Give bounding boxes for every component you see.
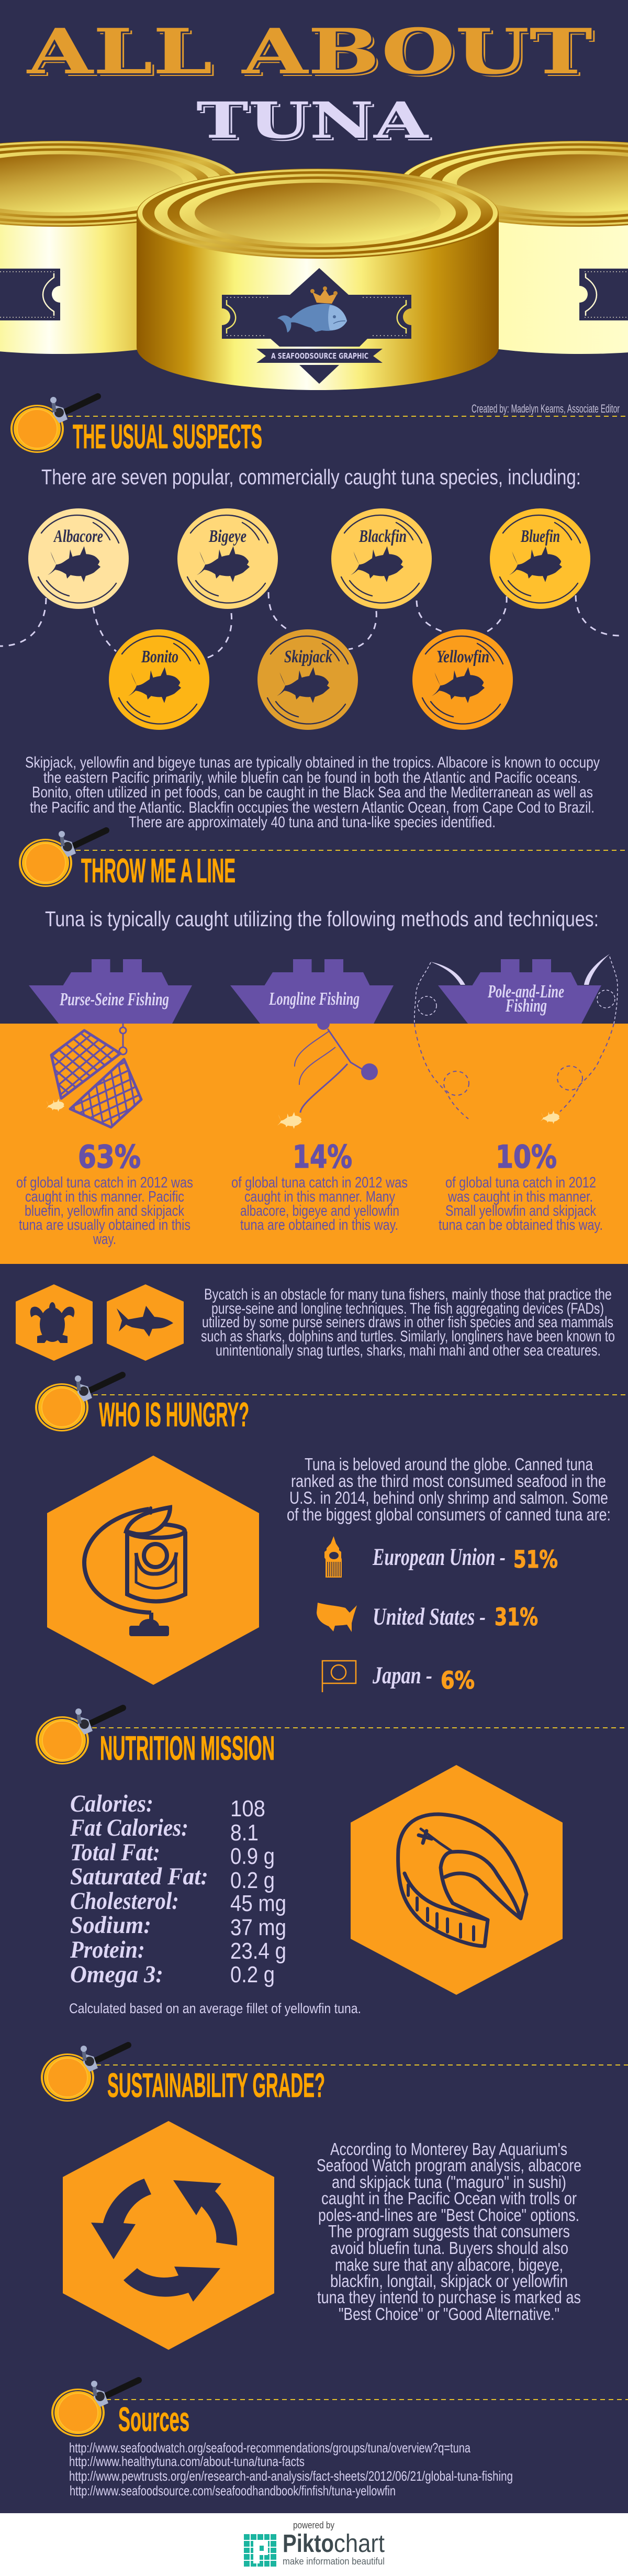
- section heading with can icon: WHO IS HUNGRY?: [99, 1395, 249, 1434]
- icon: fish steak hexagon: [351, 1765, 563, 1995]
- method: purse-seine fishing: Purse-Seine Fishing: [59, 989, 169, 1009]
- nutrition table: 23.4 g: [230, 1938, 286, 1964]
- method: pole-and-line fishing: Small yellowfin and skipjack: [445, 1203, 596, 1219]
- section: throw me a line: [0, 830, 628, 1264]
- method: pole-and-line fishing: Pole-and-Line: [487, 981, 564, 1002]
- right can: [399, 141, 628, 354]
- nutrition table: [70, 1790, 286, 1988]
- method: longline fishing: tuna are obtained in this way.: [240, 1217, 398, 1234]
- can label badge: [222, 268, 411, 384]
- ship: [230, 959, 394, 1024]
- bycatch paragraph: [201, 1286, 615, 1359]
- method: pole-and-line fishing: of global tuna catch in 2012: [445, 1174, 596, 1191]
- method: purse-seine fishing: [16, 959, 193, 1248]
- method: purse-seine fishing: tuna are usually obtained in this: [19, 1217, 190, 1234]
- nutrition table: 0.9 g: [230, 1844, 275, 1869]
- method: purse-seine fishing: caught in this manner. Pacific: [25, 1189, 184, 1205]
- icon: can on globe hexagon: [47, 1456, 259, 1685]
- method: longline fishing: 14%: [293, 1139, 352, 1175]
- ribbon text: A SEAFOODSOURCE GRAPHIC: [271, 351, 368, 361]
- nutrition table: 45 mg: [230, 1891, 286, 1916]
- species: bonito: [109, 629, 209, 730]
- consumer: european union: European Union -: [372, 1544, 506, 1571]
- footer: piktochart: [0, 2513, 628, 2576]
- section heading with can icon: [41, 2045, 628, 2104]
- consumer: united states: [317, 1603, 538, 1632]
- section: sustainability grade: [41, 2045, 628, 2350]
- section heading with can icon: NUTRITION MISSION: [100, 1729, 275, 1767]
- method: purse-seine fishing: way.: [93, 1231, 116, 1248]
- nutrition table: Omega 3:: [70, 1961, 163, 1988]
- dashed connectors: [0, 592, 623, 658]
- nutrition table: Calories:: [70, 1790, 153, 1817]
- consumer: european union: 51%: [513, 1546, 558, 1573]
- consumer: japan: Japan -: [372, 1662, 432, 1689]
- source links: http://www.pewtrusts.org/en/research-and-analysis/fact-sheets/2012/06/21/global-tuna-fishing: [69, 2468, 513, 2484]
- species: albacore: Albacore: [53, 527, 103, 546]
- footer: piktochart: make information beautiful: [283, 2556, 385, 2567]
- footer: piktochart: chart: [334, 2530, 385, 2558]
- nutrition table: 37 mg: [230, 1915, 286, 1940]
- section heading with can icon: [10, 396, 628, 456]
- method: purse-seine fishing: 63%: [78, 1139, 141, 1175]
- nutrition table: Protein:: [70, 1936, 145, 1963]
- method: longline fishing: albacore, bigeye and yellowfin: [240, 1203, 399, 1219]
- method: pole-and-line fishing: 10%: [496, 1139, 557, 1175]
- species: skipjack: Skipjack: [284, 647, 332, 667]
- icon: longline: [277, 1024, 378, 1129]
- footer: piktochart: Pikto: [283, 2530, 334, 2558]
- section heading with can icon: Sources: [118, 2400, 189, 2438]
- species: bluefin: [490, 508, 590, 609]
- species: bluefin: Bluefin: [520, 527, 560, 546]
- title line: tuna: TUNA: [196, 92, 429, 150]
- section heading with can icon: SUSTAINABILITY GRADE?: [107, 2066, 325, 2104]
- section: bycatch: [16, 1284, 615, 1361]
- sustainability paragraph: caught in the Pacific Ocean with trolls or: [321, 2189, 577, 2208]
- consumer: united states: United States -: [373, 1603, 486, 1630]
- title: [27, 15, 592, 150]
- nutrition table: Cholesterol:: [70, 1887, 179, 1915]
- species: skipjack: [257, 629, 358, 730]
- method: longline fishing: of global tuna catch in 2012 was: [231, 1174, 408, 1191]
- sustainability paragraph: avoid bluefin tuna. Buyers should also: [330, 2238, 568, 2258]
- icon: crowned fish: [277, 286, 347, 332]
- species: bonito: Bonito: [141, 647, 178, 667]
- method: pole-and-line fishing: [414, 954, 618, 1234]
- nutrition table: 0.2 g: [230, 1868, 275, 1893]
- sustainability paragraph: and skipjack tuna ("maguro" in sushi): [332, 2172, 566, 2192]
- icon: net: [46, 1024, 141, 1127]
- species paragraph: [25, 754, 600, 831]
- table footnote: Calculated based on an average fillet of yellowfin tuna.: [69, 2001, 361, 2016]
- section: the usual suspects: [0, 396, 628, 831]
- icon: dashed fishing lines: [414, 957, 618, 1124]
- orange band: [0, 1024, 628, 1264]
- sustainability paragraph: blackfin, longtail, skipjack or yellowfin: [330, 2271, 568, 2291]
- ship: [438, 959, 601, 1024]
- method: longline fishing: [230, 959, 408, 1234]
- section: nutrition mission: [36, 1708, 628, 2016]
- icon: japan flag: [322, 1661, 356, 1692]
- section heading with can icon: [19, 830, 628, 890]
- species: blackfin: Blackfin: [358, 527, 407, 546]
- nutrition table: 108: [230, 1796, 265, 1822]
- species: albacore: [28, 508, 129, 609]
- section heading with can icon: [51, 2380, 628, 2438]
- species: yellowfin: Yellowfin: [436, 647, 489, 667]
- source links: http://www.healthytuna.com/about-tuna/tuna-facts: [69, 2453, 305, 2469]
- species: yellowfin: [412, 629, 513, 730]
- icon: shark hexagon: [107, 1284, 184, 1361]
- species paragraph: There are approximately 40 tuna and tuna-like species identified.: [129, 814, 496, 831]
- species: bigeye: Bigeye: [208, 527, 246, 546]
- icon: piktochart logo: [244, 2534, 276, 2567]
- nutrition table: Saturated Fat:: [70, 1863, 208, 1890]
- title line: all about: ALL ABOUT: [27, 15, 592, 88]
- section heading with can icon: [35, 1375, 628, 1434]
- section heading with can icon: THE USUAL SUSPECTS: [73, 417, 262, 456]
- sustainability paragraph: "Best Choice" or "Good Alternative.": [339, 2304, 559, 2324]
- consumer: united states: 31%: [495, 1603, 538, 1631]
- source links: [69, 2440, 513, 2499]
- nutrition table: 8.1: [230, 1820, 259, 1846]
- nutrition table: Sodium:: [70, 1912, 151, 1939]
- consumer: european union: [324, 1536, 558, 1578]
- species: blackfin: [331, 508, 432, 609]
- center can: [137, 169, 499, 390]
- method: purse-seine fishing: bluefin, yellowfin and skipjack: [25, 1203, 184, 1219]
- illustration: three tuna cans: [0, 141, 628, 390]
- nutrition table: Total Fat:: [70, 1839, 160, 1866]
- method: longline fishing: Longline Fishing: [268, 989, 360, 1009]
- icon: recycling arrows hexagon: [63, 2121, 274, 2350]
- method: longline fishing: caught in this manner. Many: [244, 1189, 395, 1205]
- icon: turtle hexagon: [16, 1284, 93, 1361]
- sustainability paragraph: The program suggests that consumers: [328, 2222, 570, 2241]
- fishing poles: [431, 954, 610, 985]
- nutrition table: Fat Calories:: [70, 1814, 188, 1841]
- sustainability paragraph: [317, 2139, 581, 2324]
- section heading with can icon: [36, 1708, 628, 1767]
- species: bigeye: [177, 508, 278, 609]
- consumer: japan: [322, 1661, 475, 1694]
- sustainability paragraph: make sure that any albacore, bigeye,: [335, 2255, 563, 2274]
- sustainability paragraph: According to Monterey Bay Aquarium's: [330, 2139, 567, 2159]
- method: purse-seine fishing: of global tuna catch in 2012 was: [16, 1174, 193, 1191]
- source links: http://www.seafoodsource.com/seafoodhandbook/finfish/tuna-yellowfin: [70, 2483, 396, 2499]
- left can: [0, 141, 241, 354]
- source links: http://www.seafoodwatch.org/seafood-recommendations/groups/tuna/overview?q=tuna: [69, 2440, 470, 2456]
- icon: us map: [317, 1603, 357, 1632]
- nutrition table: 0.2 g: [230, 1962, 275, 1987]
- ship: [29, 959, 192, 1024]
- icon: big ben: [324, 1536, 342, 1578]
- consumer: japan: 6%: [441, 1667, 475, 1694]
- section: sources: [51, 2380, 628, 2499]
- footer: piktochart: powered by: [293, 2520, 334, 2530]
- section: who is hungry: [35, 1375, 628, 1694]
- method: pole-and-line fishing: was caught in this manner.: [447, 1189, 593, 1205]
- consumers paragraph: [287, 1454, 611, 1524]
- section heading with can icon: THROW ME A LINE: [81, 851, 236, 890]
- method: pole-and-line fishing: Fishing: [505, 995, 547, 1016]
